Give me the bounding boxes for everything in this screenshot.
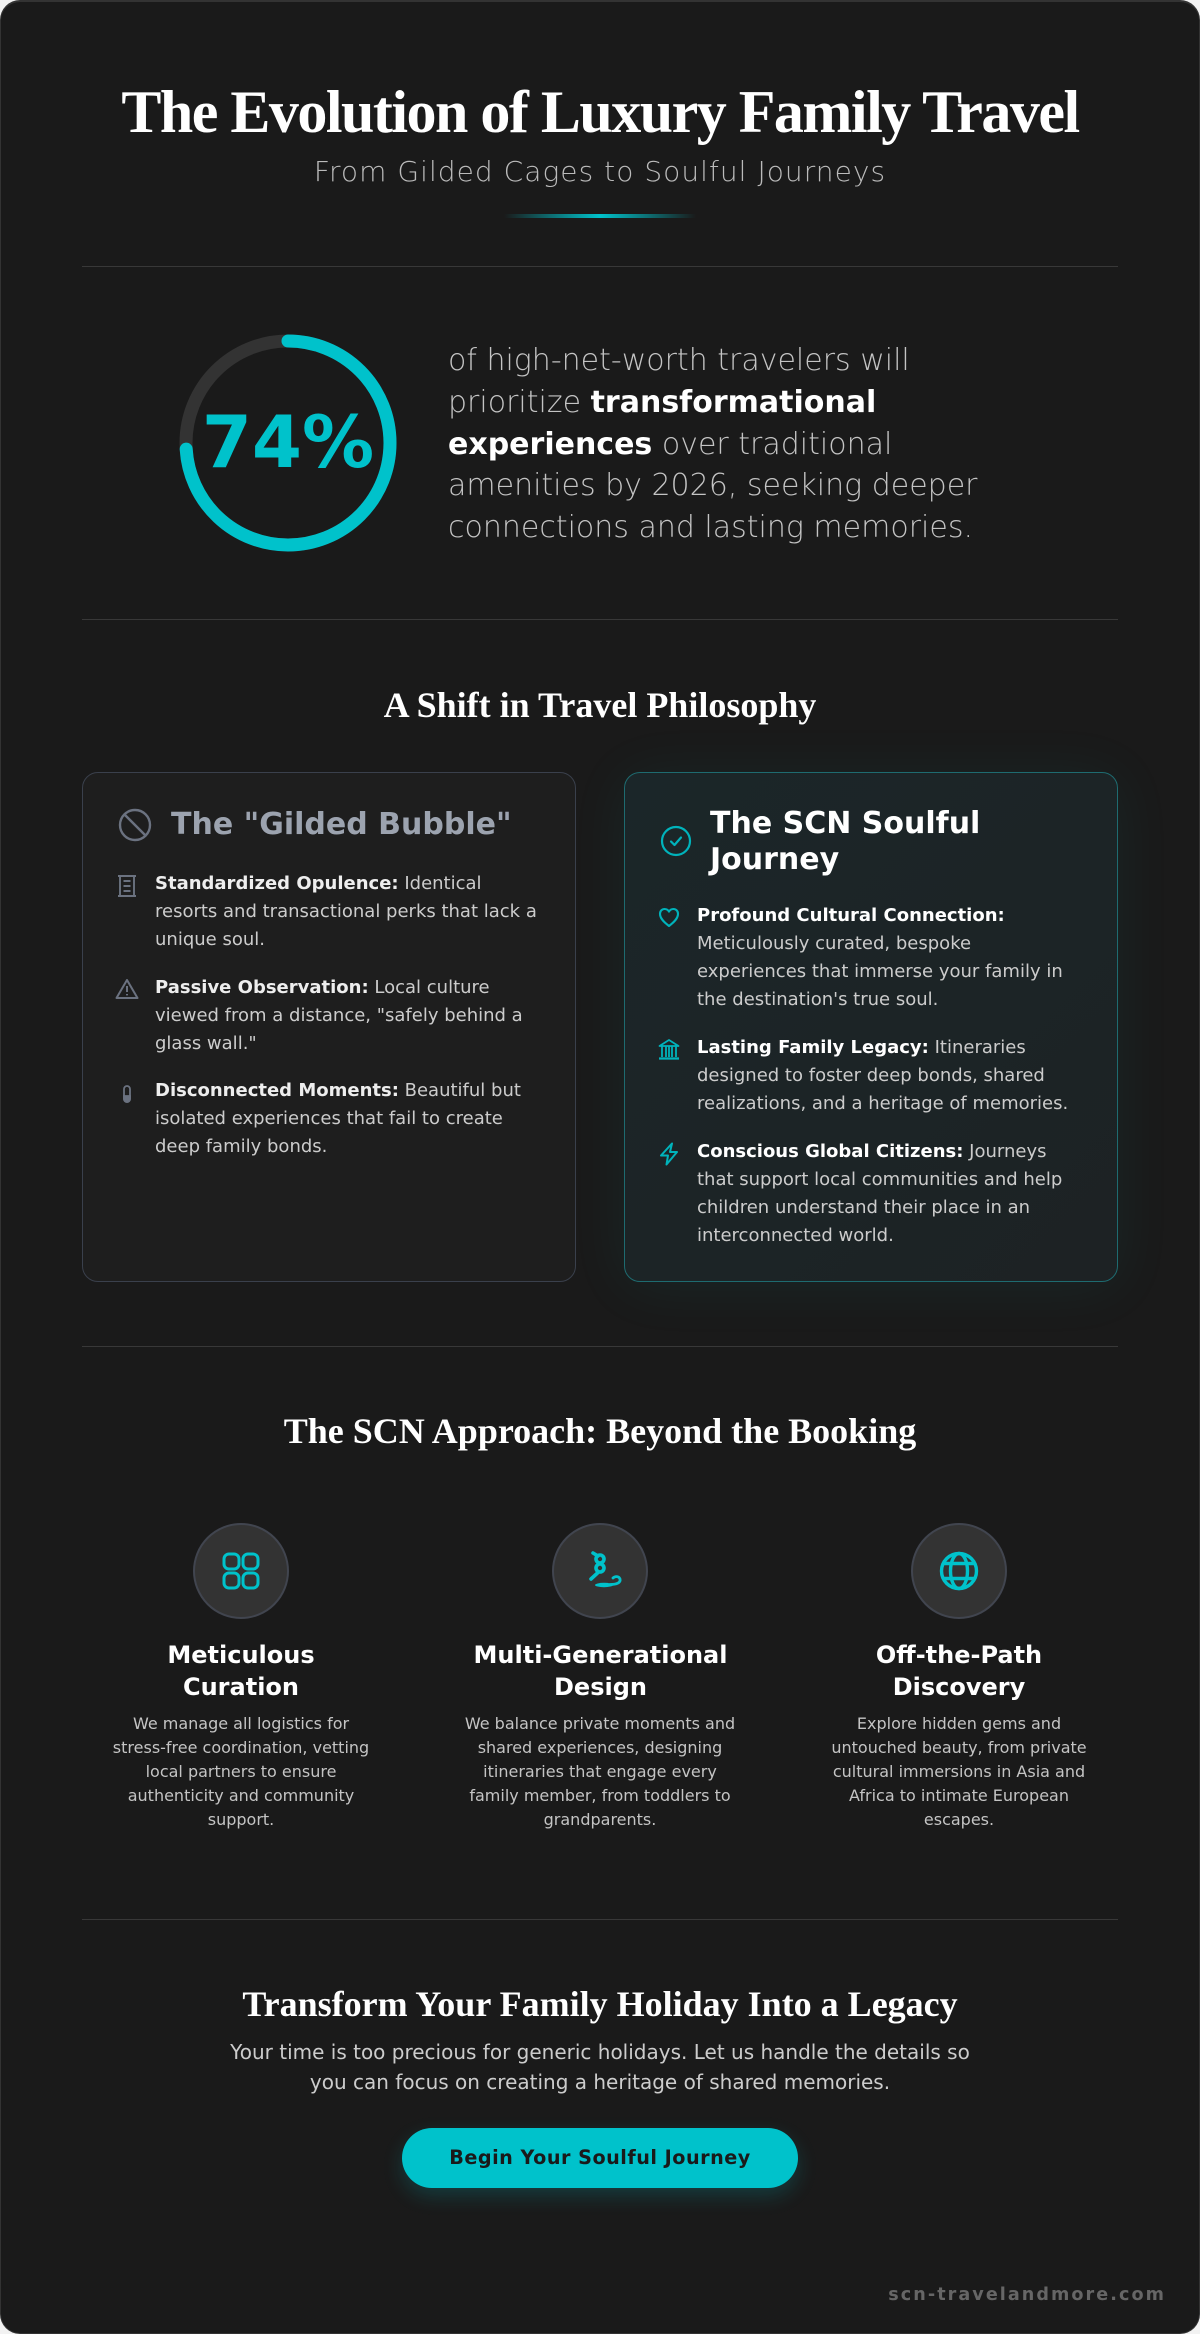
column heading: Off-the-Path: [876, 1641, 1042, 1669]
column heading: Design: [554, 1673, 647, 1701]
item: cultural connection: the destination's true soul.: [697, 989, 938, 1010]
column heading: [876, 1641, 1042, 1701]
stat section: [180, 334, 978, 552]
icon: ban: [118, 808, 152, 842]
stat text: experiences over traditional: [448, 427, 892, 462]
column text: We manage all logistics for: [133, 1714, 349, 1733]
column text: Africa to intimate European: [849, 1786, 1069, 1805]
column: meticulous curation: [113, 1523, 369, 1829]
stat text: of high-net-worth travelers will: [448, 343, 910, 378]
cta button: [402, 2128, 798, 2188]
column text: escapes.: [924, 1810, 994, 1829]
stat text: amenities by 2026, seeking deeper: [448, 468, 977, 503]
column text: [831, 1714, 1087, 1829]
item: passive observation: [155, 977, 523, 1054]
item: standardized opulence: [155, 873, 537, 950]
icon: check circle: [660, 826, 692, 856]
item: family legacy: realizations, and a heritage of memories.: [697, 1093, 1068, 1114]
accent line: [504, 214, 696, 218]
panel heading: The "Gilded Bubble": [171, 807, 512, 842]
column heading: Meticulous: [167, 1641, 315, 1669]
column heading: [474, 1641, 727, 1701]
cta heading: Transform Your Family Holiday Into a Legacy: [242, 1984, 958, 2024]
column heading: Multi-Generational: [474, 1641, 727, 1669]
item: disconnected moments: deep family bonds.: [155, 1136, 327, 1157]
column text: cultural immersions in Asia and: [833, 1762, 1085, 1781]
item: family legacy: Lasting Family Legacy: Itineraries: [697, 1037, 1026, 1058]
icon: figures: [552, 1523, 648, 1619]
item: global citizens: Conscious Global Citizens: Journeys: [697, 1141, 1047, 1162]
column text: stress-free coordination, vetting: [113, 1738, 369, 1757]
item: disconnected moments: [155, 1080, 521, 1157]
cta button: Begin Your Soulful Journey: [449, 2146, 751, 2169]
column text: We balance private moments and: [465, 1714, 735, 1733]
panel: soulful journey: [624, 772, 1118, 1282]
column text: local partners to ensure: [146, 1762, 336, 1781]
donut chart 74%: [180, 334, 396, 552]
column heading: Curation: [183, 1673, 299, 1701]
item: family legacy: designed to foster deep bonds, shared: [697, 1065, 1045, 1086]
panel heading: [708, 806, 980, 877]
icon: globe: [911, 1523, 1007, 1619]
cta text: you can focus on creating a heritage of shared memories.: [310, 2070, 890, 2094]
column text: itineraries that engage every: [483, 1762, 717, 1781]
item: cultural connection: Meticulously curated, bespoke: [697, 933, 971, 954]
column text: grandparents.: [544, 1810, 656, 1829]
column heading: Discovery: [893, 1673, 1025, 1701]
item: family legacy: [697, 1037, 1068, 1114]
item: standardized opulence: Standardized Opulence: Identical: [155, 873, 482, 894]
column text: support.: [208, 1810, 274, 1829]
column text: [465, 1714, 735, 1829]
subtitle: From Gilded Cages to Soulful Journeys: [314, 155, 886, 188]
cta text: [230, 2040, 970, 2094]
icon: warning: [116, 979, 138, 999]
header: [121, 79, 1080, 218]
title: The Evolution of Luxury Family Travel: [121, 79, 1079, 145]
stat number: 74%: [202, 400, 374, 484]
icon: heart: [658, 908, 680, 928]
column text: untouched beauty, from private: [831, 1738, 1087, 1757]
item: cultural connection: [697, 905, 1063, 1010]
cta text: Your time is too precious for generic holidays. Let us handle the details so: [230, 2040, 970, 2064]
item: global citizens: that support local communities and help: [697, 1169, 1062, 1190]
stat text: connections and lasting memories.: [448, 510, 973, 545]
panel: gilded bubble: [82, 772, 576, 1282]
item: cultural connection: Profound Cultural Connection:: [697, 905, 1005, 926]
section heading: approach: The SCN Approach: Beyond the Booking: [284, 1411, 916, 1451]
panel heading: The SCN Soulful: [710, 806, 980, 841]
icon: building: [118, 875, 136, 897]
call to action: [230, 1984, 970, 2202]
section heading: philosophy: A Shift in Travel Philosophy: [384, 685, 816, 725]
item: global citizens: [697, 1141, 1062, 1246]
item: passive observation: Passive Observation: Local culture: [155, 977, 490, 998]
column text: shared experiences, designing: [478, 1738, 722, 1757]
column heading: [167, 1641, 315, 1701]
footer url: scn-travelandmore.com: [888, 2285, 1166, 2305]
column text: family member, from toddlers to: [469, 1786, 731, 1805]
column: off-the-path discovery: [831, 1523, 1087, 1829]
item: standardized opulence: unique soul.: [155, 929, 265, 950]
icon: pill: [123, 1085, 131, 1103]
item: disconnected moments: isolated experiences that fail to create: [155, 1108, 503, 1129]
panel heading: Journey: [710, 842, 839, 877]
item: disconnected moments: Disconnected Moments: Beautiful but: [155, 1080, 521, 1101]
icon: grid: [193, 1523, 289, 1619]
item: cultural connection: experiences that immerse your family in: [697, 961, 1063, 982]
icon: lightning: [660, 1142, 678, 1166]
item: standardized opulence: resorts and transactional perks that lack a: [155, 901, 537, 922]
column text: [113, 1714, 369, 1829]
icon: bank: [658, 1039, 680, 1060]
item: passive observation: viewed from a distance, "safely behind a: [155, 1005, 523, 1026]
item: global citizens: interconnected world.: [697, 1225, 894, 1246]
stat text: [448, 343, 978, 545]
column: multi-generational design: [465, 1523, 735, 1829]
item: global citizens: children understand their place in an: [697, 1197, 1030, 1218]
column text: authenticity and community: [128, 1786, 354, 1805]
column text: Explore hidden gems and: [857, 1714, 1061, 1733]
stat text: prioritize transformational: [448, 385, 876, 420]
item: passive observation: glass wall.": [155, 1033, 257, 1054]
